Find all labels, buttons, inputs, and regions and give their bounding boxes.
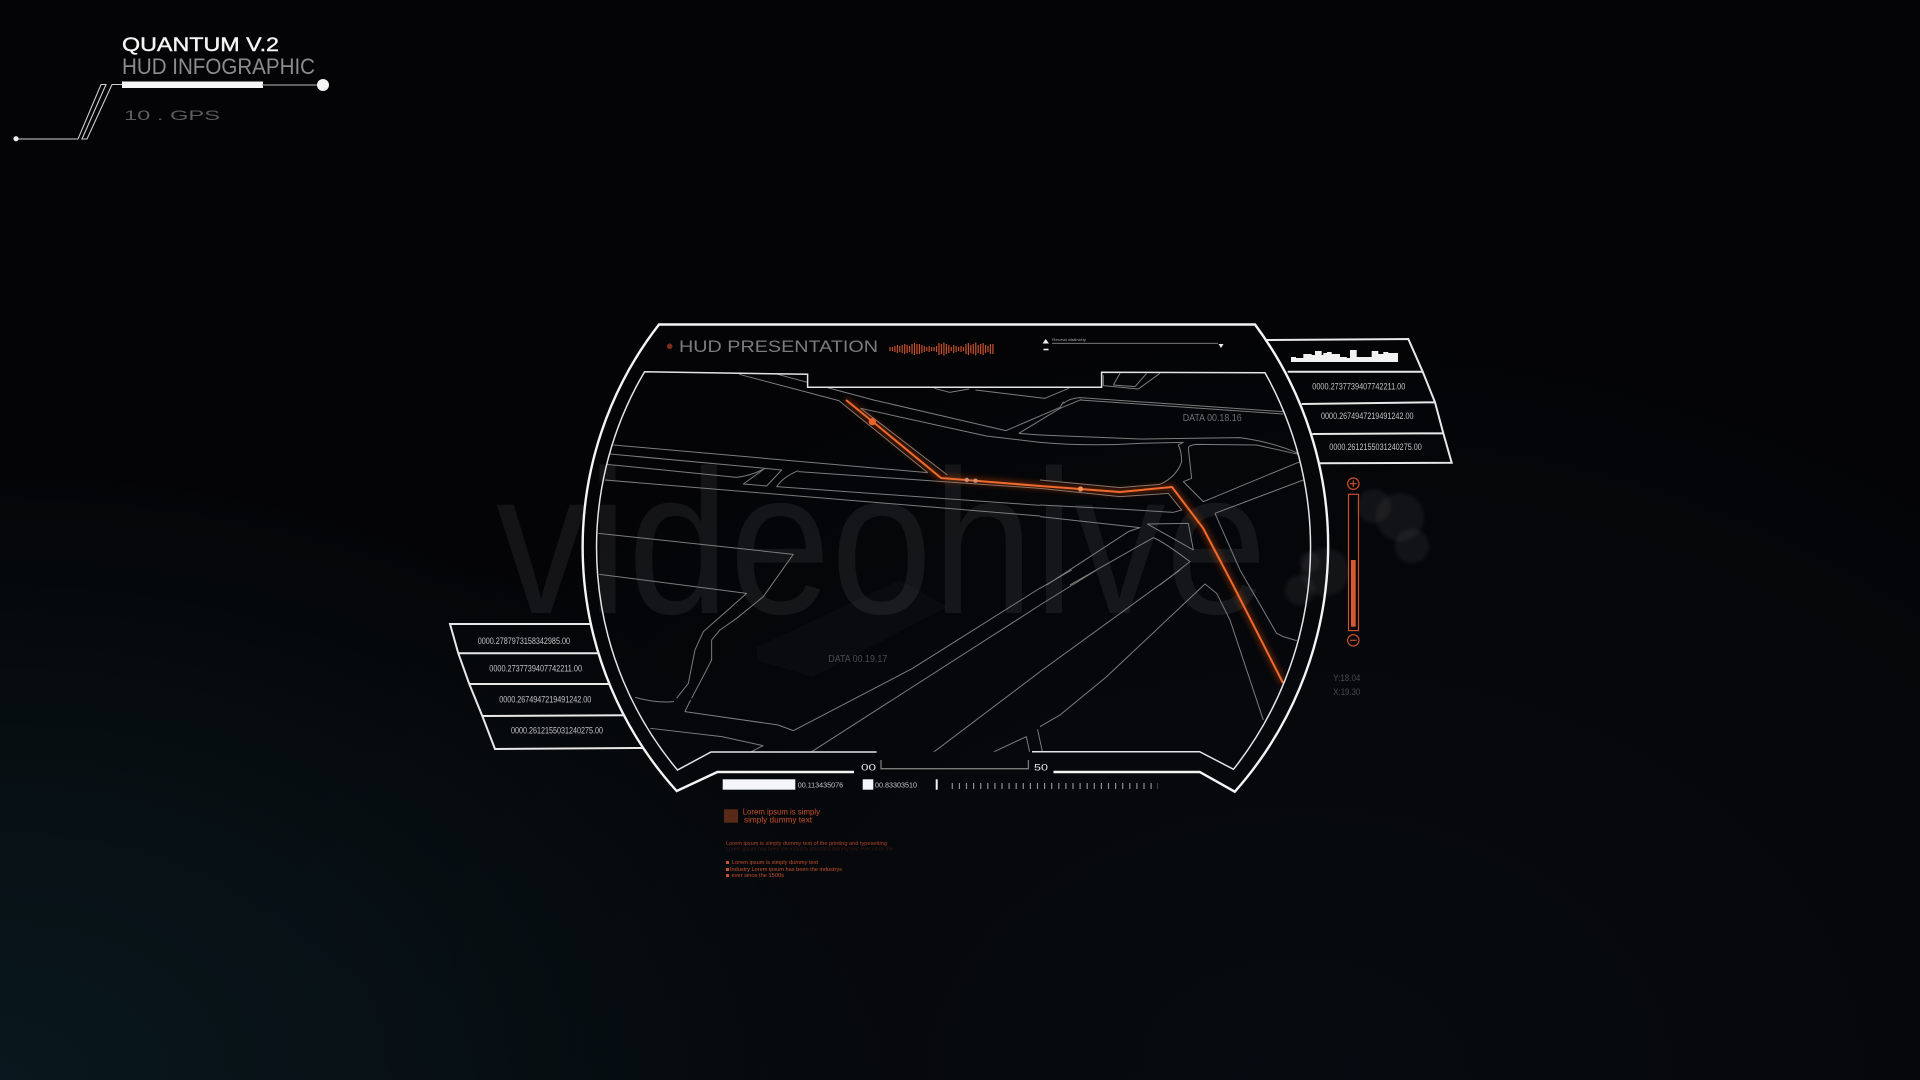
left value 4: 0000.2612155031240275.00 <box>511 726 603 736</box>
note bullets: Industry Lorem ipsum has been the industrys <box>730 867 842 873</box>
left value 3: 0000.2674947219491242.00 <box>499 695 591 705</box>
GPS route <box>846 400 1283 683</box>
icon: minus <box>1348 635 1359 646</box>
dropdown control: Reveal distinctly <box>1052 337 1086 342</box>
note paragraph: Lorem ipsum has been the industry standard dummy text ever since the <box>726 846 893 852</box>
right value 2: 0000.2674947219491242.00 <box>1321 411 1414 421</box>
left data panel <box>450 624 643 749</box>
histogram <box>1291 350 1398 362</box>
coordinates <box>1333 673 1360 697</box>
zoom slider <box>1348 478 1359 646</box>
HUD outer frame <box>583 324 1328 792</box>
route waypoints <box>869 418 1083 492</box>
icon: plus <box>1348 478 1359 489</box>
header status dot <box>667 344 672 349</box>
header title: HUD PRESENTATION <box>679 338 878 356</box>
scale start: 00 <box>861 763 876 774</box>
square value: 00.83303510 <box>875 780 917 790</box>
right value 1: 0000.2737739407742211.00 <box>1312 382 1405 392</box>
right panel outlines <box>1267 339 1452 463</box>
watermark: videohive <box>496 428 1267 657</box>
left value 2: 0000.2737739407742211.00 <box>489 664 582 674</box>
title underline bar <box>122 82 263 88</box>
left panel outlines <box>450 624 643 749</box>
map roads <box>598 373 1303 753</box>
note paragraph: Lorem ipsum is simply dummy text of the printing and typesetting <box>726 841 887 847</box>
note bullets: Lorem ipsum is simply dummy text <box>732 860 818 866</box>
subtitle: HUD INFOGRAPHIC <box>122 54 315 79</box>
left value 1: 0000.2787973158342985.00 <box>478 636 570 646</box>
note swatch <box>724 809 738 823</box>
small square <box>863 779 873 790</box>
note heading: Lorem ipsum is simply <box>743 808 820 816</box>
range bracket <box>881 760 1028 769</box>
coordinates: X:19.30 <box>1333 687 1360 697</box>
progress bar <box>723 779 795 790</box>
dropdown control <box>1042 337 1224 350</box>
connector line with end dots <box>13 79 329 141</box>
orange notes <box>724 808 893 879</box>
section label: 10 . GPS <box>124 107 220 123</box>
map data label top: DATA 00.18.16 <box>1183 413 1242 424</box>
right data panel <box>1267 339 1452 463</box>
header <box>667 337 1224 356</box>
note heading: simply dummy text <box>744 816 813 824</box>
orange waveform <box>890 342 995 356</box>
right value 3: 0000.2612155031240275.00 <box>1329 442 1422 452</box>
bottom scale <box>723 760 1158 790</box>
map data label bottom: DATA 00.19.17 <box>828 654 888 665</box>
progress value: 00.113435076 <box>798 780 843 790</box>
note paragraph <box>726 841 893 852</box>
title: quantum: QUANTUM V.2 <box>122 34 279 56</box>
marker <box>936 779 938 790</box>
HUD inner frame <box>597 372 1311 770</box>
tick ruler <box>952 783 1158 789</box>
note bullets <box>726 860 842 879</box>
coordinates: Y:18.04 <box>1333 673 1360 683</box>
scale end: 50 <box>1034 763 1048 774</box>
map panel <box>598 373 1303 753</box>
title block <box>13 34 329 141</box>
note heading <box>743 808 820 824</box>
note bullets: ever since the 1500s <box>732 873 784 879</box>
